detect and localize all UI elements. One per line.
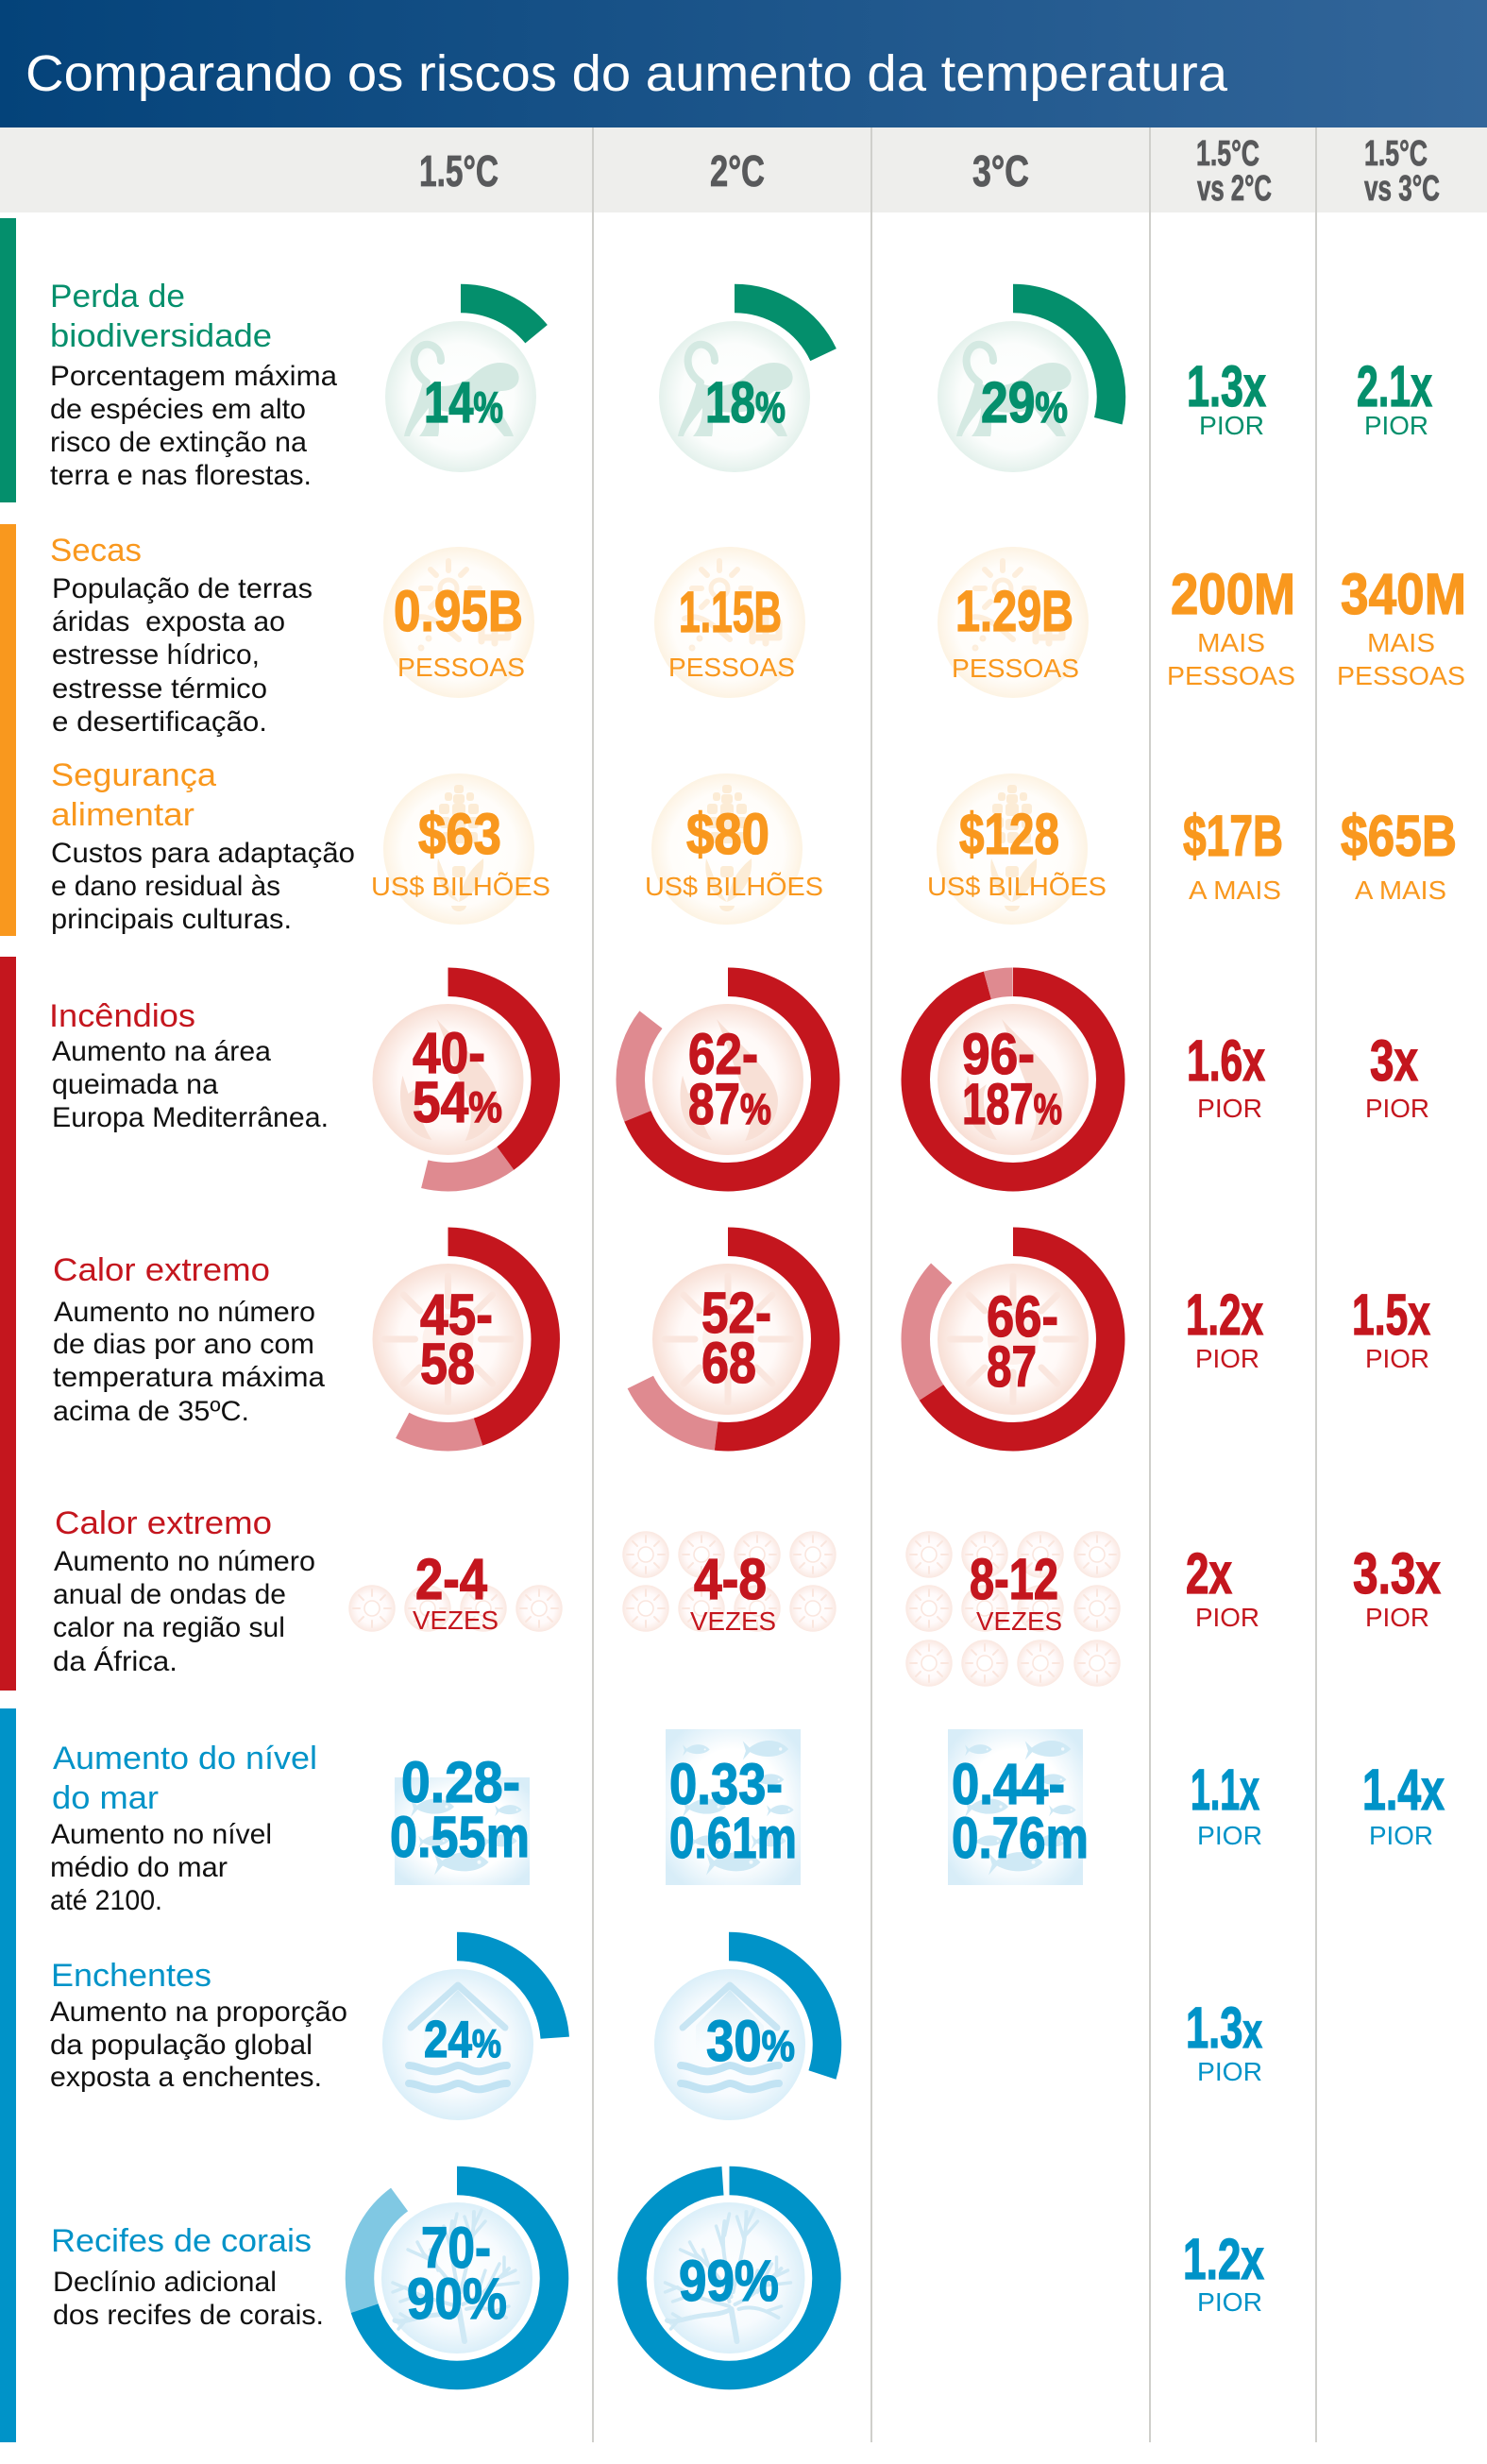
value 1.5°C: $63 <box>371 773 550 925</box>
category bar: green <box>0 218 16 502</box>
panel: Segurança alimentar <box>51 757 1457 935</box>
value 3°C: $128: US$ BILHÕES <box>927 872 1107 901</box>
description <box>52 573 313 738</box>
column heading 2°C: 2°C <box>710 146 765 195</box>
gauge 2°C: 62-87% <box>631 982 825 1177</box>
gauge 1.5°C: 14%: 14% <box>424 370 503 434</box>
value 3°C: 1.29B <box>938 547 1089 698</box>
gauge 2°C: 99% <box>633 2181 827 2375</box>
description <box>50 1997 347 2093</box>
description <box>50 361 337 491</box>
gauge 3°C: 66-87: 87 <box>987 1334 1037 1399</box>
gauge 3°C: 29%: 29% <box>981 370 1068 434</box>
value 3°C: 1.29B: PESSOAS <box>952 654 1079 683</box>
heading: Recifes de corais <box>51 2223 312 2259</box>
gauge 3°C: 66-87: 66- <box>987 1284 1058 1349</box>
value 1.5°C: 0.28-0.55m <box>390 1750 530 1885</box>
heading <box>50 279 272 354</box>
title: Comparando os riscos do aumento da temperatura <box>25 45 1228 102</box>
comparison 1.5 vs 3: PESSOAS <box>1337 661 1465 690</box>
comparison 1.5 vs 3: A MAIS <box>1355 875 1446 905</box>
value 2°C: $80: US$ BILHÕES <box>645 872 823 901</box>
column heading 1.5°C vs 3°C: vs 3°C <box>1364 169 1440 209</box>
description: risco de extinção na <box>50 427 307 458</box>
description: queimada na <box>52 1069 218 1100</box>
value 2°C: 1.15B: 1.15B <box>679 580 782 644</box>
description: de dias por ano com <box>53 1329 314 1360</box>
comparison 1.5 vs 2: PIOR <box>1197 2287 1262 2317</box>
gauge 1.5°C: 45-58: 45- <box>420 1283 493 1347</box>
value 3°C: $128: $128 <box>959 802 1059 866</box>
comparison 1.5 vs 3 <box>1353 1541 1441 1632</box>
description: da África. <box>53 1646 177 1677</box>
description: até 2100. <box>50 1885 162 1916</box>
gauge 1.5°C: 40-54% <box>350 982 546 1177</box>
column heading 1.5°C vs 2°C: 1.5°C <box>1196 134 1259 174</box>
panel: Calor extremo (ondas de calor) <box>53 1505 1441 1687</box>
column heading 1.5°C: 1.5°C <box>419 146 498 195</box>
comparison 1.5 vs 2: 1.2x <box>1186 1283 1263 1347</box>
description: estresse hídrico, <box>52 639 260 671</box>
comparison 1.5 vs 2 <box>1186 1283 1263 1373</box>
description: de espécies em alto <box>50 394 306 425</box>
value 2°C: 4-8 vezes: 4-8 <box>694 1547 767 1611</box>
comparison 1.5 vs 3: PIOR <box>1364 411 1428 440</box>
gauge 1.5°C: 70-90%: 90% <box>407 2267 507 2331</box>
value 2°C: 1.15B: PESSOAS <box>668 653 795 682</box>
comparison 1.5 vs 2: PIOR <box>1195 1603 1259 1632</box>
value 2°C: $80 <box>645 773 823 925</box>
gauge 2°C: 52-68: 52- <box>701 1281 771 1345</box>
description: Aumento na proporção <box>50 1997 347 2028</box>
description: Porcentagem máxima <box>50 361 337 392</box>
comparison 1.5 vs 2: PIOR <box>1197 1094 1262 1123</box>
gauge 3°C: 29% <box>915 298 1111 495</box>
description: e dano residual às <box>51 871 280 902</box>
gauge 3°C: 96-187%: 96- <box>962 1022 1035 1086</box>
value 1.5°C: 0.28-0.55m: 0.28- <box>401 1750 520 1814</box>
heading: Perda de <box>50 279 185 314</box>
value 2°C: 1.15B <box>654 547 805 698</box>
description: dos recifes de corais. <box>53 2300 324 2331</box>
description: acima de 35ºC. <box>53 1396 249 1427</box>
description: terra e nas florestas. <box>50 460 312 491</box>
description: Declínio adicional <box>53 2267 277 2298</box>
comparison 1.5 vs 3 <box>1341 804 1457 905</box>
comparison 1.5 vs 2 <box>1191 1758 1262 1850</box>
comparison 1.5 vs 3: PIOR <box>1369 1821 1433 1850</box>
comparison 1.5 vs 2: PIOR <box>1195 1344 1259 1373</box>
description: Aumento no número <box>54 1546 315 1577</box>
panel: Perda de biodiversidade <box>50 279 1432 495</box>
gauge 1.5°C: 24% <box>359 1946 555 2143</box>
comparison 1.5 vs 2: PESSOAS <box>1167 661 1295 690</box>
comparison 1.5 vs 2: PIOR <box>1199 411 1264 440</box>
description <box>50 1819 272 1916</box>
gauge 1.5°C: 45-58: 58 <box>420 1332 475 1396</box>
gauge 2°C: 52-68 <box>631 1242 825 1436</box>
comparison 1.5 vs 2: 1.2x <box>1183 2227 1264 2291</box>
comparison 1.5 vs 3: 340M <box>1341 562 1466 626</box>
value 2°C: 4-8 vezes: VEZES <box>690 1606 776 1636</box>
panel: Incêndios <box>49 982 1429 1177</box>
category bar: red <box>0 957 16 1691</box>
description: Europa Mediterrânea. <box>52 1102 329 1133</box>
description: População de terras <box>52 573 313 604</box>
description: da população global <box>50 2030 313 2061</box>
comparison 1.5 vs 2 <box>1187 354 1266 440</box>
comparison 1.5 vs 2 <box>1186 1996 1262 2086</box>
comparison 1.5 vs 2: PIOR <box>1197 2057 1262 2086</box>
value 1.5°C: $63: US$ BILHÕES <box>371 872 550 901</box>
value 3°C: $128 <box>927 773 1107 925</box>
comparison 1.5 vs 3: PIOR <box>1365 1344 1429 1373</box>
comparison 1.5 vs 3 <box>1352 1283 1430 1373</box>
comparison 1.5 vs 2 <box>1186 1541 1259 1632</box>
value 2°C: 0.33-0.61m: 0.33- <box>669 1752 783 1816</box>
heading: Aumento do nível <box>53 1741 317 1776</box>
comparison 1.5 vs 2: MAIS <box>1197 628 1265 657</box>
comparison 1.5 vs 2: A MAIS <box>1189 875 1281 905</box>
comparison 1.5 vs 2: $17B <box>1183 804 1283 868</box>
description: áridas exposta ao <box>52 606 285 637</box>
comparison 1.5 vs 3 <box>1337 562 1466 690</box>
comparison 1.5 vs 3: 1.5x <box>1352 1283 1430 1347</box>
value 1.5°C: 0.95B: 0.95B <box>394 579 523 643</box>
gauge 2°C: 30%: 30% <box>706 2009 795 2073</box>
value 1.5°C: 0.28-0.55m: 0.55m <box>390 1805 530 1869</box>
description <box>53 2267 324 2331</box>
heading: do mar <box>52 1780 159 1816</box>
value 1.5°C: 2-4 vezes: 2-4 <box>415 1547 487 1611</box>
heading: biodiversidade <box>50 318 272 354</box>
comparison 1.5 vs 3: PIOR <box>1365 1094 1429 1123</box>
gauge 2°C: 30% <box>631 1946 827 2143</box>
comparison 1.5 vs 2 <box>1167 562 1295 690</box>
heading: alimentar <box>51 797 194 833</box>
header band <box>0 0 1487 127</box>
value 2°C: 0.33-0.61m <box>666 1729 801 1885</box>
panel: Calor extremo (dias) <box>53 1242 1430 1436</box>
gauge 2°C: 52-68: 68 <box>701 1331 756 1395</box>
comparison 1.5 vs 2 <box>1187 1028 1265 1123</box>
heading: Enchentes <box>51 1958 211 1994</box>
column heading 1.5°C vs 3°C <box>1364 134 1440 209</box>
gauge 1.5°C: 45-58 <box>350 1242 546 1436</box>
value 3°C: 8-12 vezes <box>905 1531 1121 1687</box>
description <box>51 838 355 935</box>
column heading 3°C: 3°C <box>972 146 1029 195</box>
comparison 1.5 vs 3 <box>1365 1028 1429 1123</box>
gauge 1.5°C: 40-54%: 40- <box>413 1021 485 1085</box>
description: e desertificação. <box>52 706 267 738</box>
description: Custos para adaptação <box>51 838 355 869</box>
heading <box>51 757 216 833</box>
column heading 1.5°C vs 2°C <box>1196 134 1272 209</box>
panel: Enchentes <box>50 1946 1262 2143</box>
category bar: orange <box>0 524 16 936</box>
comparison 1.5 vs 2: PIOR <box>1197 1821 1262 1850</box>
gauge 1.5°C: 24%: 24% <box>424 2010 501 2068</box>
value 3°C: 0.44-0.76m: 0.76m <box>952 1806 1089 1870</box>
value 1.5°C: 2-4 vezes <box>348 1547 563 1635</box>
gauge 3°C: 96-187%: 187% <box>962 1072 1062 1136</box>
value 1.5°C: 2-4 vezes: VEZES <box>413 1606 498 1635</box>
comparison 1.5 vs 3: $65B <box>1341 804 1457 868</box>
value 3°C: 0.44-0.76m: 0.44- <box>952 1752 1065 1816</box>
description: principais culturas. <box>51 904 292 935</box>
category bar: blue <box>0 1708 16 2442</box>
panel: Aumento do nível do mar <box>50 1729 1445 1916</box>
comparison 1.5 vs 3: 2.1x <box>1357 354 1432 418</box>
heading <box>52 1741 317 1816</box>
column heading 1.5°C vs 3°C: 1.5°C <box>1364 134 1428 174</box>
comparison 1.5 vs 2 <box>1183 804 1283 905</box>
comparison 1.5 vs 2: 2x <box>1186 1541 1232 1606</box>
value 1.5°C: $63: $63 <box>418 802 501 866</box>
gauge 1.5°C: 40-54%: 54% <box>413 1070 502 1134</box>
heading: Incêndios <box>49 998 195 1034</box>
value 2°C: 0.33-0.61m: 0.61m <box>669 1806 797 1870</box>
comparison 1.5 vs 3: PIOR <box>1365 1603 1429 1632</box>
value 2°C: 4-8 vezes <box>622 1531 836 1636</box>
comparison 1.5 vs 3 <box>1362 1758 1445 1850</box>
value 1.5°C: 0.95B <box>383 547 534 698</box>
heading: Segurança <box>51 757 216 793</box>
comparison 1.5 vs 3: MAIS <box>1367 628 1435 657</box>
comparison 1.5 vs 2: 1.1x <box>1191 1758 1259 1822</box>
value 3°C: 0.44-0.76m <box>948 1729 1089 1885</box>
comparison 1.5 vs 3 <box>1357 354 1432 440</box>
gauge 2°C: 18% <box>636 298 833 495</box>
gauge 3°C: 66-87 <box>916 1242 1110 1436</box>
description: Aumento no número <box>54 1297 315 1328</box>
comparison 1.5 vs 2: 1.3x <box>1187 354 1266 418</box>
heading: Secas <box>50 533 142 569</box>
description: temperatura máxima <box>53 1362 325 1393</box>
description <box>53 1546 315 1677</box>
description: Aumento na área <box>52 1036 271 1067</box>
gauge 3°C: 96-187% <box>916 982 1110 1177</box>
description: médio do mar <box>50 1852 228 1883</box>
gauge 1.5°C: 14% <box>363 298 559 495</box>
gauge 2°C: 18%: 18% <box>705 370 786 434</box>
description: estresse térmico <box>52 673 267 705</box>
comparison 1.5 vs 3: 3x <box>1370 1028 1418 1093</box>
comparison 1.5 vs 2 <box>1183 2227 1264 2317</box>
value 1.5°C: 0.95B: PESSOAS <box>397 653 525 682</box>
panel: Recifes de corais <box>51 2181 1264 2375</box>
gauge 2°C: 62-87%: 62- <box>688 1022 758 1086</box>
gauge 2°C: 99%: 99% <box>679 2249 779 2313</box>
gauge 1.5°C: 70-90% <box>360 2181 554 2375</box>
description: anual de ondas de <box>53 1579 286 1610</box>
comparison 1.5 vs 3: 3.3x <box>1353 1541 1441 1606</box>
value 3°C: 8-12 vezes: VEZES <box>976 1606 1062 1636</box>
value 2°C: $80: $80 <box>686 802 769 866</box>
comparison 1.5 vs 2: 1.6x <box>1187 1028 1265 1093</box>
description: calor na região sul <box>53 1612 285 1643</box>
description: Aumento no nível <box>51 1819 272 1850</box>
comparison 1.5 vs 2: 1.3x <box>1186 1996 1262 2060</box>
panel: Secas <box>50 533 1466 738</box>
description: exposta a enchentes. <box>50 2062 322 2093</box>
heading: Calor extremo <box>53 1252 270 1288</box>
value 3°C: 8-12 vezes: 8-12 <box>970 1547 1058 1611</box>
column heading 1.5°C vs 2°C: vs 2°C <box>1197 169 1272 209</box>
gauge 2°C: 62-87%: 87% <box>688 1072 771 1136</box>
gauge 1.5°C: 70-90%: 70- <box>421 2216 491 2280</box>
column header strip <box>0 127 1487 212</box>
value 3°C: 1.29B: 1.29B <box>955 579 1073 643</box>
comparison 1.5 vs 2: 200M <box>1171 562 1295 626</box>
description <box>52 1036 329 1133</box>
comparison 1.5 vs 3: 1.4x <box>1362 1758 1445 1822</box>
description <box>53 1297 325 1427</box>
heading: Calor extremo <box>55 1505 272 1541</box>
